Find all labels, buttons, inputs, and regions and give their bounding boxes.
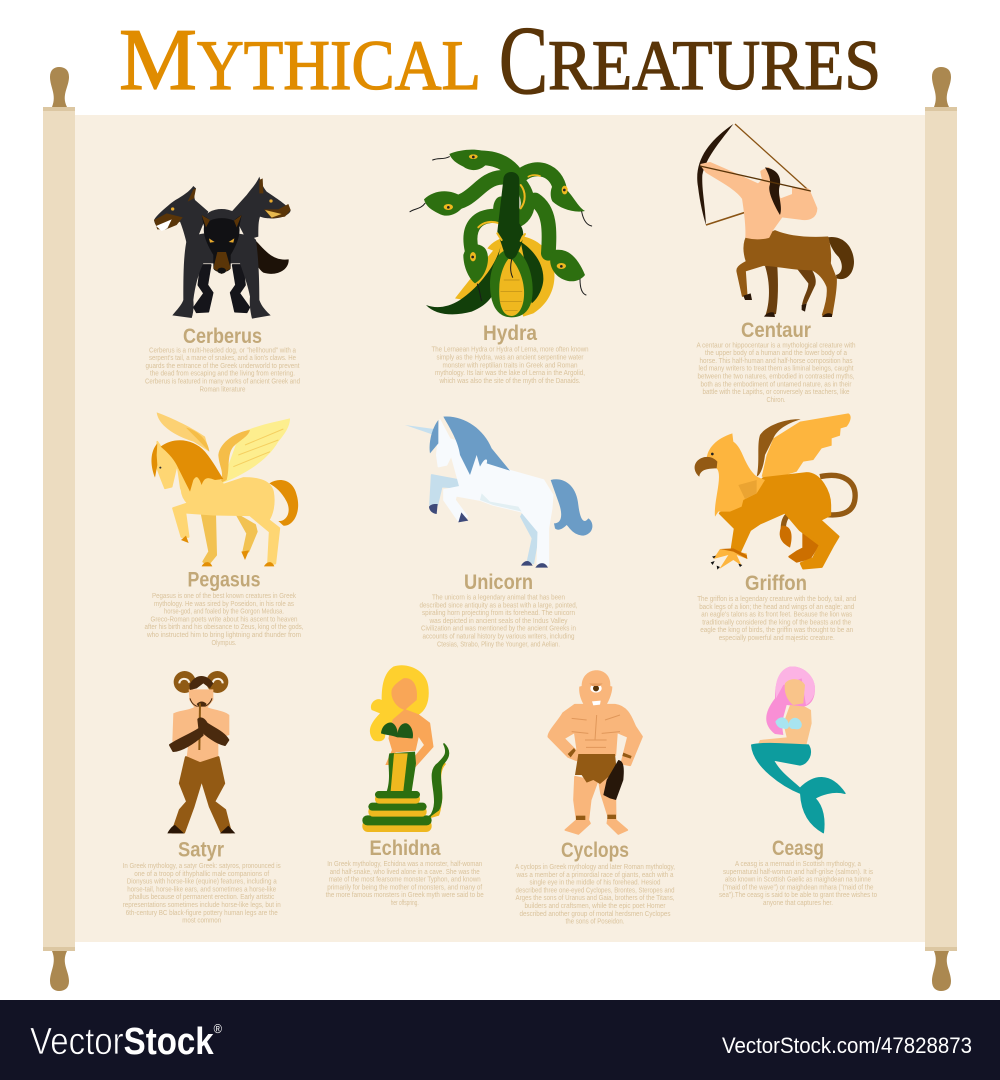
- text block: Ceasg: Ceasg: [772, 837, 824, 860]
- title: M: [119, 12, 197, 109]
- text block: Satyr: most common: [182, 918, 221, 925]
- title: [119, 7, 881, 115]
- text block: Cyclops: Cyclops: [561, 839, 629, 862]
- text block: Centaur: A centaur or hippocentaur is a mythological creature with: [696, 342, 856, 349]
- text block: Hydra: Hydra: [483, 322, 537, 345]
- text block: Unicorn: accounts of natural history by various writers, including: [422, 634, 575, 640]
- text block: Pegasus: after his birth and his obeisance to Zeus, king of the gods,: [144, 624, 304, 631]
- text block: Griffon: an eagle's talons as its front feet. Because the lion was: [701, 612, 853, 619]
- icon: echidna: [362, 665, 448, 832]
- text block: Satyr: phallus because of permanent erection. Early artistic: [129, 894, 275, 901]
- text block: Pegasus: Olympus.: [212, 640, 237, 647]
- text block: Cyclops: A cyclops in Greek mythology and later Roman mythology,: [515, 864, 675, 871]
- text block: Satyr: representations sometimes include horse-like legs, but in: [123, 902, 281, 909]
- icon: left scroll rod: [43, 67, 75, 991]
- text block: Ceasg: sea").The ceasg is said to be able to grant three wishes to: [719, 892, 877, 899]
- text block: Griffon: Griffon: [745, 572, 807, 595]
- text block: Centaur: [696, 319, 856, 404]
- text block: Griffon: [697, 572, 856, 642]
- text block: Hydra: The Lernaean Hydra or Hydra of Lerna, more often known: [432, 347, 589, 354]
- icon: centaur: [697, 124, 854, 317]
- text block: Hydra: monster with reptilian traits in Greek and Roman: [442, 362, 578, 369]
- text block: Griffon: especially powerful and majestic creature.: [719, 635, 835, 642]
- text block: Satyr: one of a troop of ithyphallic male companions of: [134, 871, 269, 878]
- text block: Griffon: The griffon is a legendary creature with the body, tail, and: [697, 596, 856, 603]
- text block: Cerberus: Roman literature: [200, 386, 246, 393]
- text block: Centaur: Chiron.: [766, 397, 786, 404]
- text block: Centaur: horse. This half-human and half-horse composition has: [700, 358, 853, 365]
- text block: Centaur: led many writers to treat them as liminal beings, caught: [698, 366, 854, 373]
- text block: Pegasus: mythology. He was sired by Poseidon, in his role as: [154, 601, 294, 608]
- text block: Cerberus: guards the entrance of the Greek underworld to prevent: [146, 363, 300, 370]
- text block: Cerberus: the dead from escaping and the living from entering.: [150, 371, 295, 378]
- icon: right scroll rod: [925, 67, 957, 991]
- text block: Pegasus: Pegasus is one of the best known creatures in Greek: [152, 593, 296, 600]
- text block: Echidna: primarily for being the mother of monsters, and many of: [327, 884, 482, 891]
- text block: Echidna: her offspring.: [391, 900, 419, 907]
- text block: Cyclops: Arges the sons of Uranus and Gaia, brothers of the Titans,: [516, 895, 675, 902]
- text block: Ceasg: anyone that captures her.: [763, 900, 833, 907]
- text block: Ceasg: A ceasg is a mermaid in Scottish mythology, a: [735, 861, 861, 868]
- text block: Ceasg: also known in Scottish Gaelic as maighdean na tuinne: [725, 877, 871, 884]
- text block: Unicorn: Ctesias, Strabo, Pliny the Younger, and Aelian.: [437, 641, 560, 648]
- icon: unicorn: [405, 417, 592, 568]
- text block: Cyclops: [515, 839, 675, 926]
- text block: Griffon: back legs of a lion; the head and wings of an eagle; and: [699, 604, 854, 611]
- text block: Cerberus: Cerberus is featured in many works of ancient Greek and: [145, 378, 300, 386]
- text block: Echidna: [326, 837, 484, 907]
- text block: Unicorn: The unicorn is a legendary animal that has been: [432, 594, 565, 602]
- text block: Centaur: battle with the Lapiths, or conversely as teachers, like: [702, 389, 850, 396]
- text block: Ceasg: supernatural half-woman and half-grilse (salmon). It is: [723, 869, 873, 876]
- text block: Unicorn: was depicted in ancient seals of the Indus Valley: [429, 618, 568, 625]
- text block: Pegasus: Pegasus: [188, 569, 260, 592]
- text block: Centaur: Centaur: [741, 319, 811, 342]
- text block: Satyr: In Greek mythology, a satyr Greek: satyros, pronounced is: [123, 863, 281, 870]
- text block: Griffon: traditionally considered the king of the beasts and the: [702, 619, 851, 626]
- text block: Unicorn: spiraling horn projecting from its forehead. The unicorn: [422, 610, 575, 617]
- text block: Unicorn: Unicorn: [464, 571, 533, 594]
- text block: Pegasus: who instructed him to bring lightning and thunder from: [146, 632, 301, 639]
- text block: Satyr: Dionysus with horse-like (equine) features, including a: [127, 879, 277, 886]
- text block: Ceasg: ("maid of the wave") or maighdean mhara ("maid of the: [722, 884, 874, 891]
- text block: Echidna: Echidna: [370, 837, 441, 860]
- text block: Cerberus: Cerberus: [183, 325, 262, 348]
- logo: VectorStock: ®: [214, 1021, 222, 1036]
- text block: Cyclops: described three one-eyed Cyclopes, Brontes, Steropes and: [516, 887, 675, 894]
- text block: Cyclops: the sons of Poseidon.: [566, 919, 625, 926]
- text block: Cerberus: Cerberus is a multi-headed dog, or "hellhound" with a: [149, 347, 296, 354]
- text block: Hydra: simply as the Hydra, was an ancient serpentine water: [436, 354, 584, 362]
- text block: Cyclops: single eye in the middle of his forehead. Hesiod: [530, 880, 661, 887]
- icon: cerberus: [154, 177, 291, 319]
- text block: Centaur: between the two natures, embodied in contrasted myths,: [698, 374, 855, 380]
- text block: Satyr: horse-tail, horse-like ears, and sometimes a horse-like: [127, 886, 276, 893]
- text block: Satyr: Satyr: [178, 839, 224, 862]
- footer bar: [0, 1000, 1000, 1080]
- text block: Pegasus: Greco-Roman poets write about his ascent to heaven: [150, 616, 298, 623]
- text block: Hydra: which was also the site of the myth of the Danaids.: [439, 378, 581, 385]
- text block: Unicorn: described since antiquity as a beast with a large, pointed,: [420, 602, 578, 609]
- icon: cyclops: [549, 670, 642, 834]
- text block: Echidna: the more famous monsters in Greek myth were said to be: [326, 892, 484, 899]
- text block: Echidna: mate of the most fearsome monster Typhon, and known: [329, 877, 481, 884]
- text block: Cyclops: was a member of a primordial race of giants, each with a: [516, 872, 674, 879]
- text block: Pegasus: [144, 569, 304, 647]
- text block: Echidna: In Greek mythology, Echidna was a monster, half-woman: [327, 861, 482, 868]
- icon: ceasg: [752, 667, 845, 833]
- text block: Satyr: 6th-century BC black-figure pottery human legs are the: [126, 910, 278, 917]
- text block: Cyclops: described another group of mortal herdsmen Cyclopes: [520, 911, 671, 918]
- title: REATURES: [548, 27, 881, 105]
- text block: Cerberus: [145, 325, 300, 393]
- text block: Centaur: the upper body of a human and the lower body of a: [705, 350, 847, 357]
- text block: Hydra: [432, 322, 589, 385]
- title: C: [499, 7, 548, 115]
- icon: satyr: [167, 671, 235, 833]
- panel: scroll parchment: [75, 115, 925, 942]
- text block: Unicorn: [420, 571, 578, 648]
- text block: Cerberus: serpent's tail, a mane of snakes, and a lion's claws. He: [149, 355, 296, 362]
- text block: Pegasus: horse-god, and foaled by the Gorgon Medusa.: [164, 609, 284, 616]
- icon: griffon: [695, 413, 855, 570]
- text block: Hydra: mythology. Its lair was the lake of Lerna in the Argolid,: [435, 370, 585, 377]
- text block: Centaur: both as the embodiment of untamed nature, as in their: [700, 381, 852, 388]
- icon: hydra: [410, 150, 592, 317]
- footer image id: VectorStock.com/47828873: [722, 1033, 972, 1058]
- logo: VectorStock: VectorStock: [30, 1021, 227, 1063]
- text block: Echidna: and half-snake, who lived alone in a cave. She was the: [330, 869, 480, 876]
- text block: Griffon: eagle the king of birds, the griffin was thought to be an: [700, 627, 853, 634]
- text block: Cyclops: builders and craftsmen, while the epic poet Homer: [524, 903, 666, 910]
- text block: Ceasg: [719, 837, 877, 907]
- text block: Satyr: [123, 839, 281, 925]
- title: YTHICAL: [197, 27, 481, 105]
- icon: pegasus: [151, 412, 298, 566]
- text block: Unicorn: Civilization and was mentioned by the ancient Greeks in: [421, 626, 576, 633]
